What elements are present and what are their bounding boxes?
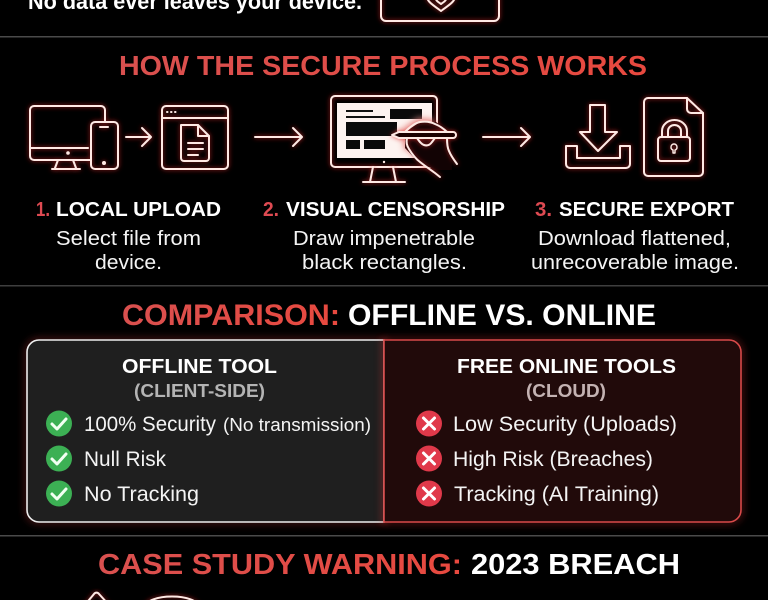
step 2 text: 2. [263, 199, 279, 221]
icon: partial mark top right [706, 0, 708, 2]
item: high risk: High Risk (Breaches) [453, 448, 653, 471]
arrow: step 1 inner [126, 128, 151, 146]
heading: comparison [122, 299, 656, 332]
step 3 text: unrecoverable image. [531, 252, 739, 274]
item: tracking: Tracking (AI Training) [454, 483, 659, 506]
icon: monitor with redaction and hand [331, 96, 457, 182]
icon: desktop and phone [30, 106, 118, 169]
check icon 1 [46, 410, 72, 436]
item: no tracking: No Tracking [84, 483, 199, 506]
step 2 text: black rectangles. [302, 252, 467, 274]
icon: locked document [644, 98, 703, 176]
icon: warning triangle top [84, 593, 110, 600]
icon: download tray [566, 105, 630, 168]
panel: offline tool [27, 340, 384, 522]
step 1 text [36, 199, 221, 274]
icon: browser window with file [162, 106, 228, 169]
heading: how the secure process works: HOW THE SECURE PROCESS WORKS [119, 50, 647, 81]
item: 100% security [84, 413, 371, 436]
panel: free online tools [384, 340, 741, 522]
check icon 2 [46, 446, 72, 472]
offline subheading: (CLIENT-SIDE) [134, 381, 265, 401]
arrow: step 1 to step 2 [255, 128, 302, 146]
heading: case study warning [98, 549, 680, 581]
item: 100% security: 100% Security [84, 413, 216, 436]
heading: case study warning: CASE STUDY WARNING: [98, 549, 462, 581]
step 3 text [531, 199, 739, 274]
step 3 text: 3. [535, 199, 552, 221]
step 1 text: device. [95, 252, 162, 274]
step 2 text: VISUAL CENSORSHIP [286, 199, 505, 221]
check icon 3 [46, 480, 72, 506]
heading: case study warning: 2023 BREACH [471, 549, 680, 581]
heading: comparison: COMPARISON: [122, 299, 340, 332]
step 3 text: SECURE EXPORT [559, 199, 734, 221]
cross icon 2 [416, 446, 442, 472]
step 2 text: Draw impenetrable [293, 228, 475, 250]
heading: comparison: OFFLINE VS. ONLINE [348, 299, 656, 332]
icon: cylinder top [146, 596, 198, 600]
online heading: FREE ONLINE TOOLS [457, 356, 676, 378]
step 3 text: Download flattened, [538, 228, 731, 250]
online subheading: (CLOUD) [526, 381, 606, 401]
step 1 text: 1. [36, 199, 50, 221]
step 1 text: Select file from [56, 228, 201, 250]
step 2 text [263, 199, 505, 274]
item: 100% security: (No transmission) [223, 415, 371, 435]
item: low security: Low Security (Uploads) [453, 413, 677, 436]
offline heading: OFFLINE TOOL [122, 356, 277, 378]
cross icon 3 [416, 480, 442, 506]
arrow: step 2 to step 3 [483, 128, 530, 146]
cross icon 1 [416, 410, 442, 436]
step 1 text: LOCAL UPLOAD [56, 199, 221, 221]
item: null risk: Null Risk [84, 448, 166, 471]
icon: laptop with shield [381, 0, 499, 21]
